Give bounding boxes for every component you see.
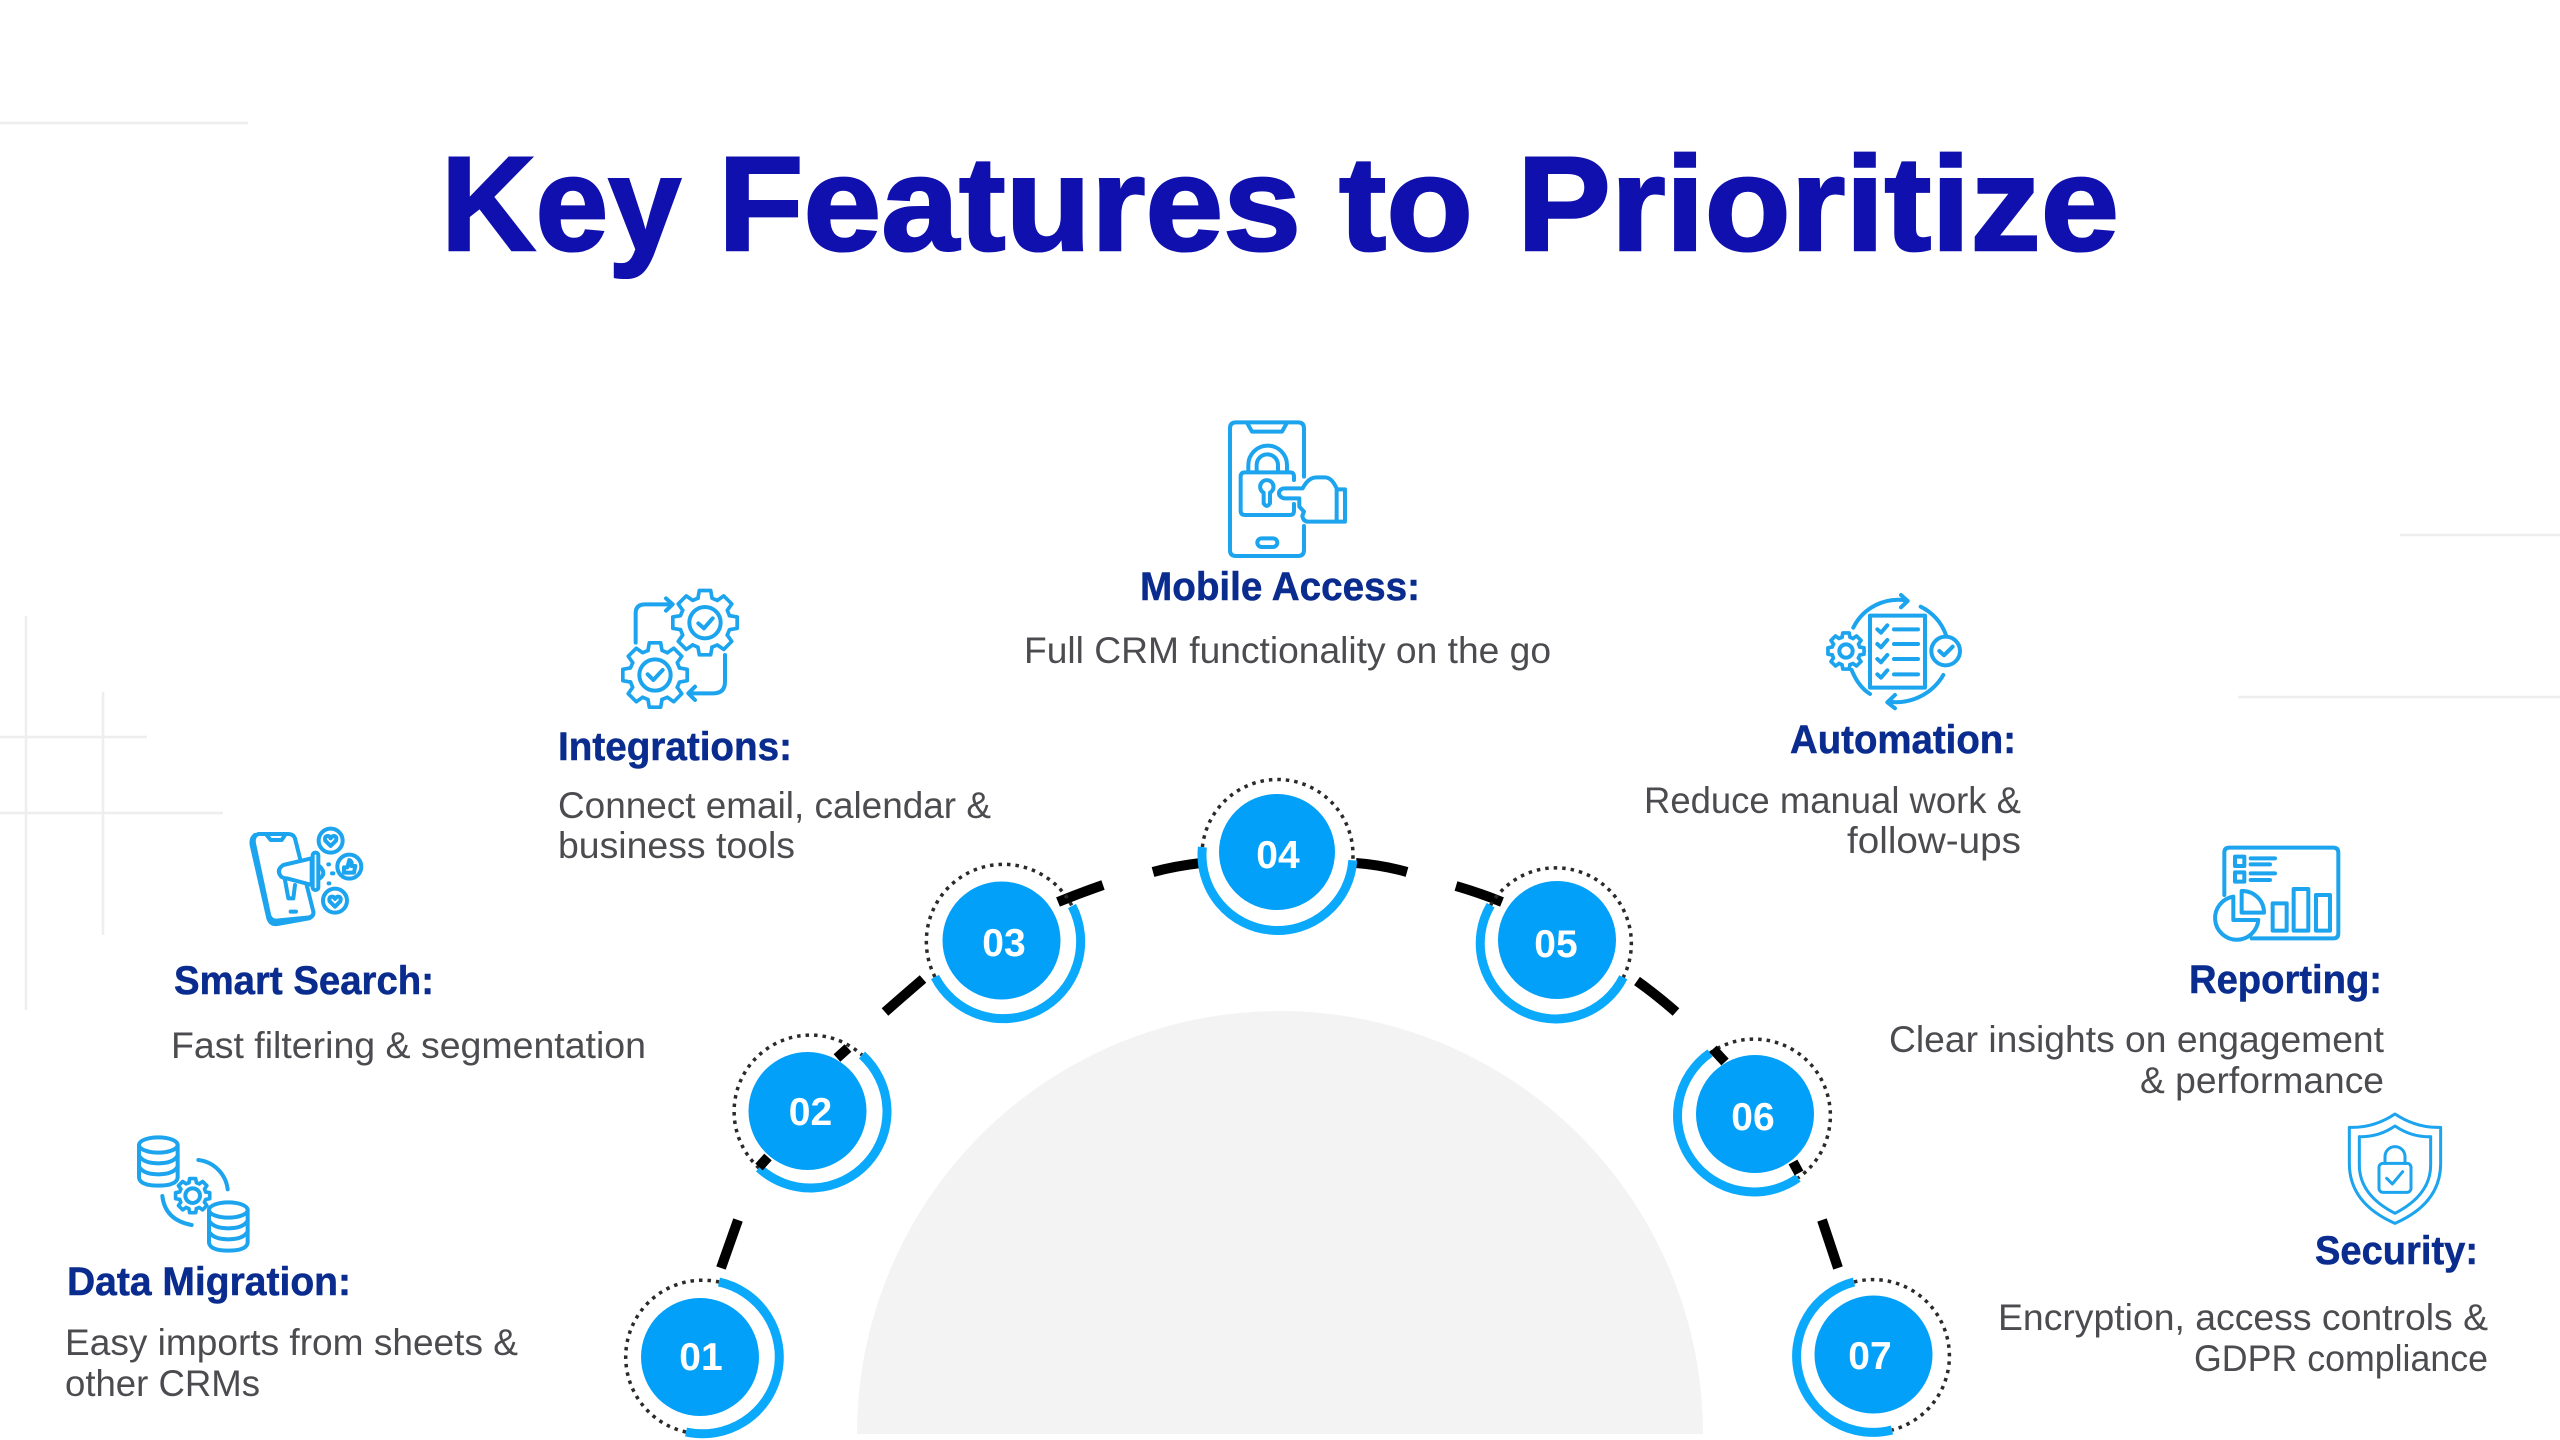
node 06: 06 xyxy=(1731,1096,1775,1139)
description: Full CRM functionality on the go xyxy=(1024,630,1551,671)
description xyxy=(1998,1297,2488,1379)
panel: smart search xyxy=(171,829,646,1066)
heading: Reporting: xyxy=(2189,958,2382,1002)
description xyxy=(1644,780,2021,861)
title: Prioritize xyxy=(1517,130,2119,279)
node 07: 07 xyxy=(1848,1335,1892,1378)
description: Connect email, calendar & xyxy=(558,785,991,826)
heading: Integrations: xyxy=(558,725,792,769)
node 01 xyxy=(626,1280,779,1434)
node 02 xyxy=(734,1035,887,1188)
description: Easy imports from sheets & xyxy=(65,1322,518,1363)
heading: Security: xyxy=(2315,1229,2478,1273)
icon: checklist with gear and cycle arrows xyxy=(1828,595,1960,708)
title: Key xyxy=(441,130,681,279)
icon: phone with padlock and pointing hand xyxy=(1230,422,1345,556)
panel: reporting xyxy=(1889,848,2385,1101)
description: Fast filtering & segmentation xyxy=(171,1025,646,1066)
description xyxy=(558,785,991,866)
description: business tools xyxy=(558,825,795,866)
node 05: 05 xyxy=(1534,923,1578,966)
node 06 xyxy=(1678,1039,1830,1192)
description: Encryption, access controls & xyxy=(1998,1297,2488,1338)
node 02: 02 xyxy=(789,1091,832,1134)
description: GDPR compliance xyxy=(2194,1338,2488,1379)
icon: two gears with arrows xyxy=(623,590,737,707)
description: Reduce manual work & xyxy=(1644,780,2021,821)
description xyxy=(1889,1019,2385,1101)
icon: phone with megaphone and reaction badges xyxy=(251,829,361,924)
node 04 xyxy=(1202,779,1353,930)
panel: security xyxy=(1998,1114,2488,1379)
description: & performance xyxy=(2140,1060,2384,1101)
description: other CRMs xyxy=(65,1363,260,1404)
heading: Automation: xyxy=(1790,718,2016,762)
node 04: 04 xyxy=(1256,834,1300,877)
icon: report dashboard xyxy=(2215,848,2338,940)
icon: databases with gear xyxy=(139,1137,248,1251)
node 03: 03 xyxy=(982,922,1026,965)
node 07 xyxy=(1797,1280,1949,1432)
panel: data migration xyxy=(65,1137,518,1404)
title xyxy=(441,130,2119,279)
heading: Mobile Access: xyxy=(1140,565,1420,609)
central grey semicircle xyxy=(857,1011,1703,1434)
description xyxy=(65,1322,518,1404)
heading: Data Migration: xyxy=(67,1260,351,1304)
icon: shield with padlock xyxy=(2349,1114,2441,1223)
panel: automation xyxy=(1644,595,2021,861)
node 05 xyxy=(1480,868,1631,1019)
description: follow-ups xyxy=(1847,820,2021,861)
title: to xyxy=(1339,130,1473,279)
panel: mobile access xyxy=(1024,422,1551,671)
connector arc segments xyxy=(721,863,1838,1268)
heading: Smart Search: xyxy=(174,959,434,1003)
panel: integrations xyxy=(558,590,991,866)
description: Clear insights on engagement xyxy=(1889,1019,2385,1060)
title: Features xyxy=(718,130,1301,279)
node 03 xyxy=(926,864,1081,1019)
node 01: 01 xyxy=(679,1336,723,1379)
